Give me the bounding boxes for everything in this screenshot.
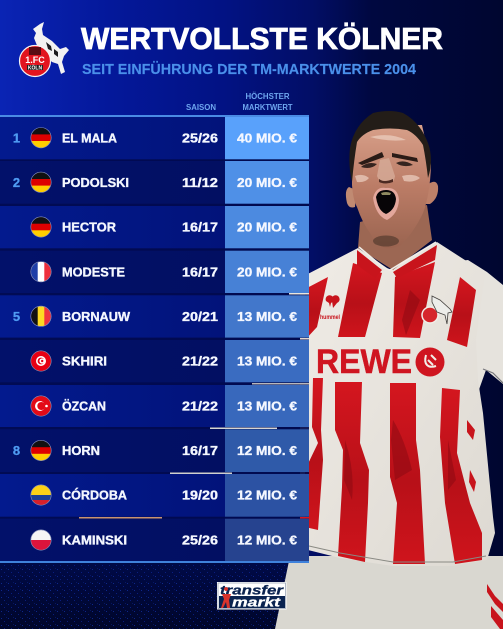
nose [377,158,395,183]
player photo [275,111,503,629]
row 1: El Mala: EL MALA [62,130,118,146]
row 1: El Mala: 25/26 [182,130,218,146]
row 2: Podolski: 20 MIO. € [237,175,297,190]
hummel logo: hummel [320,315,340,321]
flag: Germany [31,172,51,193]
flag: Colombia [31,485,51,505]
flag: France [31,262,51,282]
row 7: Özcan [0,385,309,427]
row 6: Skhiri [0,340,309,382]
hair [349,111,431,182]
jersey stripes [305,262,482,564]
row 2: Podolski: 2 [13,175,20,190]
flag: Tunisia [31,351,51,371]
footballer mark [221,587,231,608]
stripe fold shading [344,290,456,500]
flag: Germany [31,440,51,461]
open mouth [373,188,399,220]
column header: Höchster Marktwert: HÖCHSTER [246,92,290,101]
row 7: Özcan: 13 MIO. € [237,399,297,414]
row 3: Hector: 16/17 [182,220,218,235]
row 8: Horn: 12 MIO. € [237,443,297,458]
row 3: Hector: HECTOR [62,220,117,235]
logo: transfermarkt [217,582,286,610]
row 6: Skhiri: 13 MIO. € [237,354,297,369]
row 2: Podolski: PODOLSKI [62,175,129,190]
right sleeve [465,260,503,390]
goat [33,22,69,74]
row 6: Skhiri: 21/22 [182,354,218,369]
row 4: Modeste: MODESTE [62,264,125,279]
row 9: Córdoba [0,474,309,517]
column header: Höchster Marktwert: MARKTWERT [242,103,293,112]
row 3: Hector: 20 MIO. € [237,220,297,235]
row 7: Özcan: ÖZCAN [62,399,106,414]
shorts chevrons [487,584,503,629]
row 10: Kaminski: 25/26 [182,532,218,548]
row 10: Kaminski [0,519,309,561]
flag: Belgium [31,306,51,326]
row 10: Kaminski: KAMINSKI [62,532,127,548]
row 5: Bornauw [0,295,309,338]
row 8: Horn [0,429,309,472]
subtitle: SEIT EINFÜHRUNG DER TM-MARKTWERTE 2004 [82,61,417,78]
row 5: Bornauw: BORNAUW [62,309,131,324]
collar [357,245,437,278]
face [352,125,431,230]
row 4: Modeste: 20 MIO. € [237,264,297,279]
table [0,115,309,563]
REWE sponsor: REWE [316,343,412,381]
jersey [300,242,495,566]
row 5: Bornauw: 20/21 [182,309,218,324]
row 4: Modeste [0,251,309,293]
right ear [425,182,438,204]
flag: Turkey [31,396,51,416]
eyebrows [358,152,418,165]
row 2: Podolski: 11/12 [182,175,218,190]
row 9: Córdoba: CÓRDOBA [62,488,128,503]
row 8: Horn: 16/17 [182,443,218,458]
jersey crest [422,296,452,324]
neck [358,205,432,270]
goatee [373,236,399,246]
row 8: Horn: HORN [62,443,100,458]
sponsor circle [416,348,444,376]
hem [309,546,486,562]
forehead and cheek shine [355,135,420,182]
flag: Poland [31,530,51,550]
row 6: Skhiri: SKHIRI [62,354,107,369]
column header: Saison: SAISON [186,103,216,112]
logo: transfermarkt: markt [232,594,281,610]
row 5: Bornauw: 5 [13,309,20,324]
title: WERTVOLLSTE KÖLNER [81,21,443,56]
row 7: Özcan: 21/22 [182,399,218,414]
crest: 1. FC Köln [20,22,69,76]
crest: 1. FC Köln: 1.FC [25,55,45,65]
row 1: El Mala: 1 [13,130,20,146]
row 1: El Mala [0,117,309,159]
row 3: Hector [0,206,309,248]
row 10: Kaminski: 12 MIO. € [237,532,297,548]
row 8: Horn: 8 [13,443,20,458]
crest: 1. FC Köln: KÖLN [28,64,42,72]
row 2: Podolski [0,161,309,204]
column header: Höchster Marktwert [242,92,293,112]
logo: transfermarkt: transfer [220,582,284,598]
shorts [275,556,503,629]
flag: Germany [31,217,51,237]
row 9: Córdoba: 19/20 [182,488,218,503]
flag: Germany [31,128,51,148]
reflection strips between rows [79,293,309,518]
hummel logo [320,295,340,321]
eyes [361,161,413,168]
side chevrons [467,420,476,492]
row 5: Bornauw: 13 MIO. € [237,309,297,324]
row 9: Córdoba: 12 MIO. € [237,488,297,503]
left ear [346,187,356,208]
row 1: El Mala: 40 MIO. € [237,130,297,146]
row 4: Modeste: 16/17 [182,264,218,279]
red badge [20,46,50,76]
